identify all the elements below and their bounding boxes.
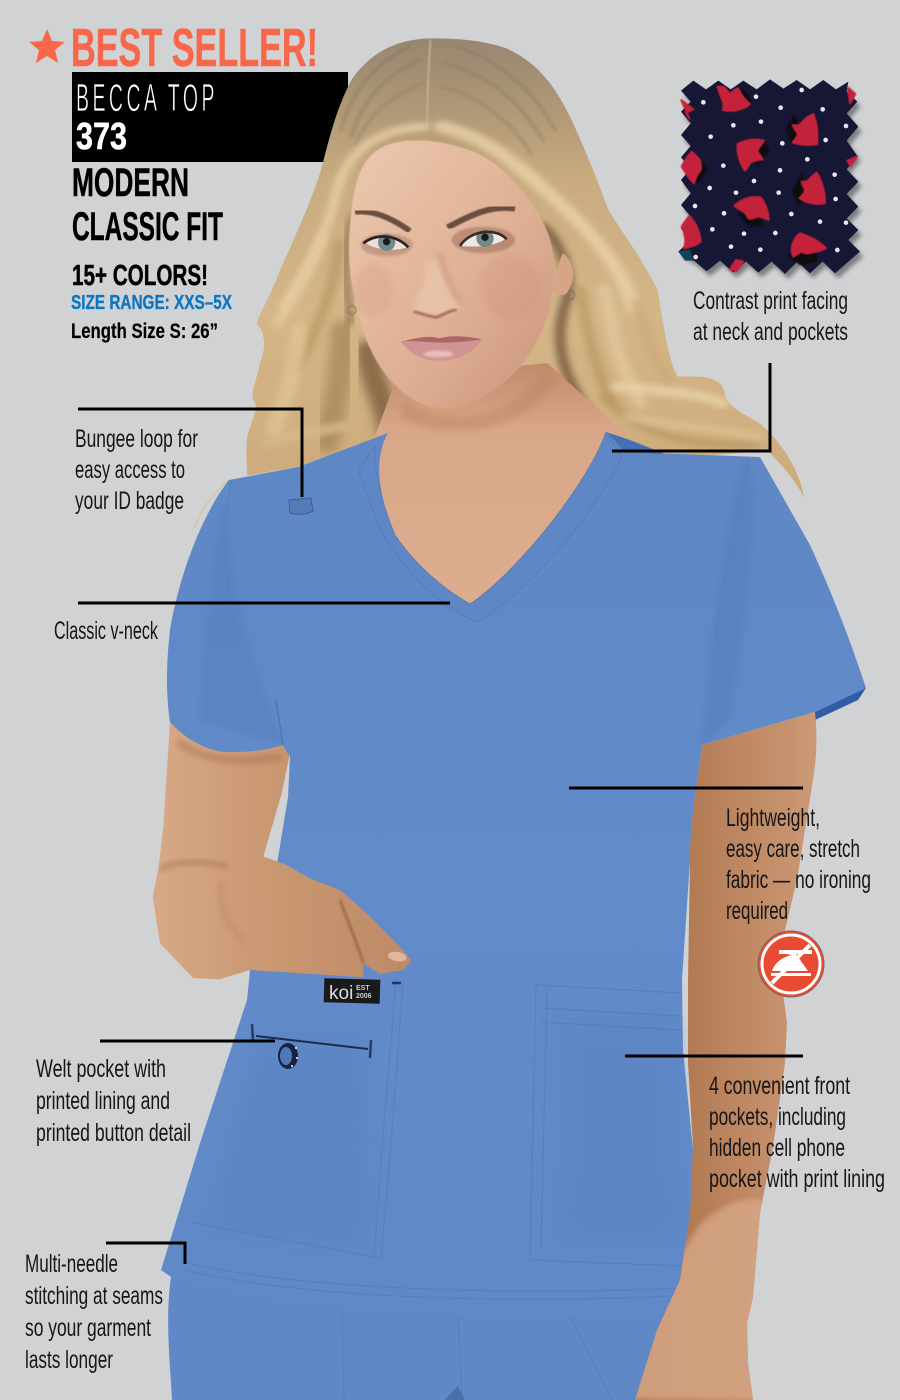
hem stitching [182, 1262, 680, 1299]
swatch flowers [681, 87, 857, 271]
callout: lightweight fabric: Lightweight, [726, 804, 820, 832]
callout: multi-needle stitching: stitching at seams [25, 1282, 163, 1310]
neck and chest [369, 363, 627, 630]
face [347, 140, 575, 409]
style number: 373 [76, 116, 127, 158]
callout: lightweight fabric [569, 788, 871, 925]
left patch pocket with welt [190, 978, 403, 1260]
neck shadow [402, 368, 556, 431]
callout: front pockets: hidden cell phone [709, 1134, 845, 1162]
callout: multi-needle stitching: so your garment [25, 1314, 151, 1342]
swatch corner [678, 249, 694, 261]
printed button [278, 1043, 298, 1069]
callout: bungee loop [75, 409, 302, 515]
shading on shirt [702, 458, 753, 745]
wrist highlight [635, 1198, 762, 1400]
callout: multi-needle stitching: lasts longer [25, 1346, 113, 1374]
right arm and hand [620, 712, 816, 1400]
callout: bungee loop: easy access to [75, 456, 185, 484]
hair [194, 38, 804, 528]
size range: SIZE RANGE: XXS–5X [71, 292, 233, 314]
fit heading line 2: CLASSIC FIT [72, 205, 223, 249]
colors: 15+ COLORS! [72, 260, 208, 292]
right patch pocket [530, 985, 682, 1266]
hand creases and shadow [160, 742, 407, 963]
length: Length Size S: 26” [71, 320, 218, 343]
star icon [29, 29, 65, 63]
fabric swatch [678, 79, 860, 274]
callout: contrast print facing [612, 287, 848, 451]
callout: lightweight fabric: required [726, 897, 788, 925]
print facing peek at neck [606, 432, 665, 454]
callout: multi-needle stitching: Multi-needle [25, 1250, 118, 1278]
left arm and hand [153, 722, 412, 979]
koi logo label: EST [356, 985, 370, 992]
v-neck facing [358, 432, 622, 622]
callout: welt pocket: printed button detail [36, 1119, 191, 1147]
sleeve seams [226, 458, 748, 640]
koi logo label [324, 978, 380, 1004]
callout: welt pocket [36, 1041, 275, 1147]
model photo: woman wearing blue scrub top: BECCA TOP [76, 77, 218, 120]
callout: welt pocket: printed lining and [36, 1087, 170, 1115]
koi logo label: 2006 [356, 993, 372, 1000]
icon: no ironing [758, 931, 824, 997]
callout: multi-needle stitching [25, 1243, 185, 1374]
callout: bungee loop: your ID badge [75, 487, 184, 515]
fit heading line 1: MODERN [72, 161, 189, 205]
left sleeve armhole seam [276, 700, 283, 745]
bungee loop [289, 498, 313, 514]
pants [168, 1277, 665, 1400]
product name black box [72, 72, 348, 162]
welt opening [256, 1036, 368, 1049]
loose wisp at left shoulder [194, 480, 229, 528]
swatch flower shadows [693, 88, 816, 264]
best seller heading: BEST SELLER! [71, 18, 318, 78]
callout: bungee loop: Bungee loop for [75, 425, 198, 453]
scrub top [161, 432, 866, 1315]
swatch dots [693, 88, 848, 259]
callout: front pockets [625, 1056, 885, 1193]
facial features [347, 208, 575, 361]
koi logo label: koi [329, 983, 353, 1004]
callout: classic v-neck: Classic v-neck [54, 617, 158, 645]
callout: welt pocket: Welt pocket with [36, 1055, 166, 1083]
